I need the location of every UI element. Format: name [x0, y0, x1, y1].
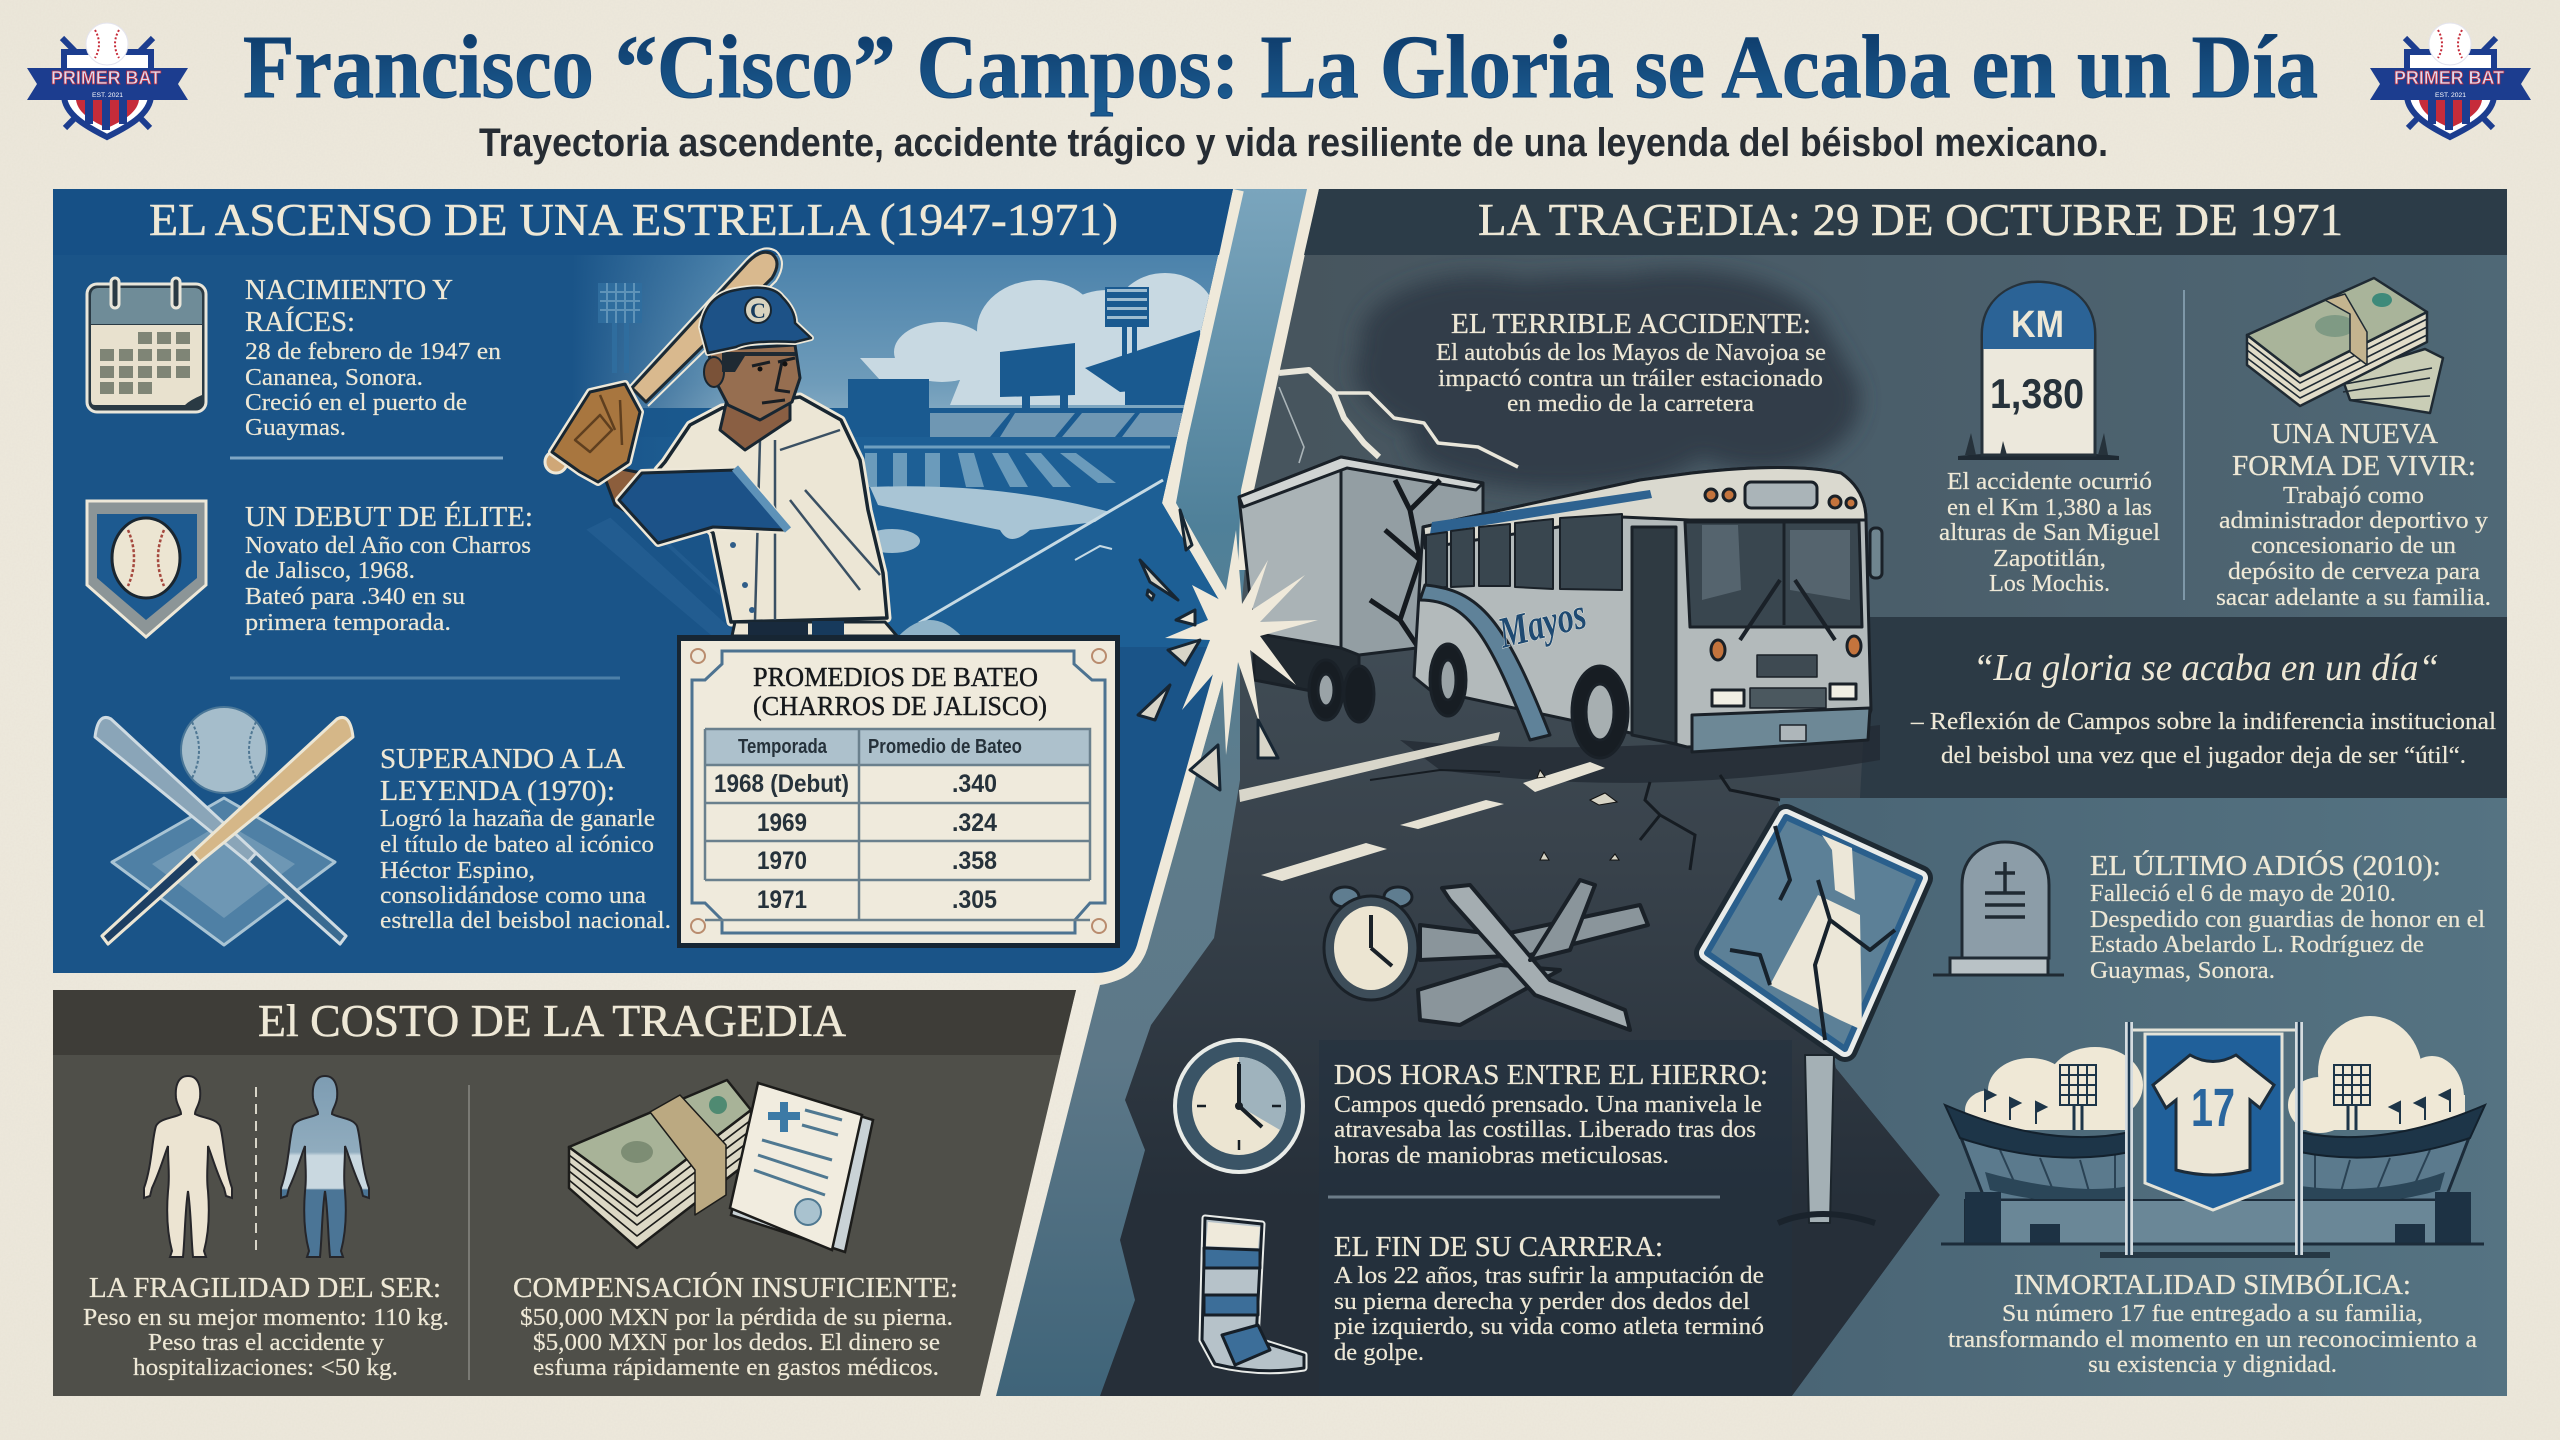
text: nacimiento: Cananea, Sonora.: [245, 365, 423, 391]
icon: calendar: [87, 278, 206, 412]
table grid: [705, 729, 1090, 765]
text: inmortalidad simbolica: Su número 17 fue entregado a su familia,: [2002, 1301, 2423, 1327]
text: km caption: Los Mochis.: [1989, 571, 2110, 597]
left fade: [530, 255, 724, 470]
belt: [732, 622, 897, 636]
table card: .324: [952, 809, 997, 837]
text: nueva forma de vivir: Trabajó como: [2283, 483, 2424, 509]
road: [1100, 620, 2507, 1396]
text: debut: primera temporada.: [245, 610, 451, 636]
illustration: batter: C: [750, 298, 766, 323]
text: debut: Bateó para .340 en su: [245, 584, 465, 610]
text: km caption: El accidente ocurrió: [1947, 469, 2152, 495]
text: compensacion: $50,000 MXN por la pérdida de su pierna.: [520, 1305, 953, 1331]
middle diagonal strip: [996, 189, 2000, 1396]
text: superando: estrella del beisbol nacional.: [380, 908, 671, 934]
text: nueva forma de vivir: depósito de cerveza para: [2228, 559, 2480, 585]
text: debut: UN DEBUT DE ÉLITE:: [245, 500, 533, 533]
text: fragilidad: Peso tras el accidente y: [148, 1330, 384, 1356]
illustration: trailer: [1239, 457, 1483, 722]
neck: [720, 395, 790, 450]
icon: leg cast: [1202, 1218, 1304, 1371]
stripe and team name: [1420, 585, 1550, 740]
light towers: [1105, 287, 1149, 356]
table card: .305: [952, 886, 997, 914]
text: debut: de Jalisco, 1968.: [245, 558, 415, 584]
header band: [53, 990, 1076, 1055]
icon: tombstone: [1933, 842, 2064, 975]
icon: money stack: [2247, 278, 2443, 413]
stadium scene: [588, 255, 1219, 647]
roofs: [1945, 1105, 2485, 1158]
text: km caption: [1939, 469, 2160, 597]
panel background upper: [1242, 189, 2507, 800]
icon: shield with ball: [87, 501, 206, 637]
logo right: PRIMER BAT: [2394, 68, 2504, 88]
white band around blue panel: [1094, 189, 1233, 973]
text: superando: Héctor Espino,: [380, 858, 535, 884]
panel: costo: [53, 990, 1076, 1396]
panel: ascenso: [53, 189, 1240, 973]
outfield: [626, 453, 1174, 490]
text: fin de carrera: A los 22 años, tras sufrir la amputación de: [1334, 1263, 1764, 1289]
storm cloud: [1355, 270, 1860, 490]
text: fin de carrera: EL FIN DE SU CARRERA:: [1334, 1231, 1663, 1263]
bumper: [1692, 708, 1870, 752]
text: km caption: alturas de San Miguel: [1939, 520, 2160, 546]
panel: la tragedia: [1100, 189, 2507, 1396]
clouds: [1965, 1016, 2465, 1140]
text: nacimiento: RAÍCES:: [245, 305, 355, 338]
seating: [638, 408, 1184, 440]
base: [1965, 1200, 2470, 1244]
text: ultimo adios: Guaymas, Sonora.: [2090, 958, 2275, 984]
text: inmortalidad simbolica: su existencia y dignidad.: [2088, 1352, 2337, 1378]
quote text: “La gloria se acaba en un día“: [1973, 647, 2439, 689]
text: fin de carrera: su pierna derecha y perder dos dedos del: [1334, 1289, 1750, 1315]
text: ultimo adios: Estado Abelardo L. Rodríguez de: [2090, 932, 2424, 958]
logo left: [27, 23, 188, 137]
cap: [701, 288, 811, 353]
wheels: [1572, 666, 1628, 758]
text: terrible accidente: EL TERRIBLE ACCIDENTE:: [1451, 308, 1811, 340]
text: km caption: Zapotitlán,: [1993, 546, 2106, 572]
text: nacimiento: Guaymas.: [245, 415, 346, 441]
quote band: [1860, 617, 2507, 798]
heading: LA TRAGEDIA: 29 DE OCTUBRE DE 1971: [1478, 195, 2343, 245]
text: ultimo adios: Falleció el 6 de mayo de 2010.: [2090, 881, 2396, 907]
sleeve: [619, 470, 784, 543]
heading: El COSTO DE LA TRAGEDIA: [258, 996, 847, 1046]
subtitle: Trayectoria ascendente, accidente trágico y vida resiliente de una leyenda del béisbol mexicano.: [479, 121, 2108, 165]
glove: [552, 384, 640, 482]
text: debut: Novato del Año con Charros: [245, 533, 531, 559]
jersey: [2153, 1055, 2274, 1175]
table card: .358: [952, 847, 997, 875]
text block shade: [1319, 1040, 1792, 1396]
logo right: EST. 2021: [2435, 93, 2467, 99]
text: inmortalidad simbolica: INMORTALIDAD SIMBÓLICA:: [2014, 1268, 2411, 1301]
faded light tower: [598, 283, 633, 373]
table card: 1968 (Debut): [714, 770, 849, 798]
text: nacimiento: 28 de febrero de 1947 en: [245, 339, 501, 365]
table text: Temporada: [738, 736, 828, 758]
text: inmortalidad simbolica: [1948, 1268, 2477, 1378]
text: debut: [245, 500, 533, 636]
text: inmortalidad simbolica: transformando el momento en un reconocimiento a: [1948, 1327, 2477, 1353]
light towers: [2060, 1065, 2370, 1130]
lower right panel: [1778, 798, 2507, 1396]
text: terrible accidente: impactó contra un tráiler estacionado: [1438, 366, 1823, 392]
illustration: road details: [1239, 725, 1880, 881]
text: nueva forma de vivir: concesionario de un: [2251, 533, 2456, 559]
text: dos horas: [1334, 1059, 1768, 1169]
destination sign and lamps: [1745, 482, 1817, 508]
text: superando: consolidándose como una: [380, 883, 646, 909]
bus door: [1632, 527, 1676, 744]
icon: crossed bats: [95, 707, 353, 945]
mirror: [1870, 528, 1882, 578]
text: dos horas: Campos quedó prensado. Una manivela le: [1334, 1092, 1762, 1118]
header band: [53, 189, 1233, 255]
text: fragilidad: hospitalizaciones: <50 kg.: [133, 1355, 398, 1381]
text: nueva forma de vivir: UNA NUEVA: [2271, 418, 2438, 450]
logo left: PRIMER BAT: [51, 68, 161, 88]
banner: [2145, 1034, 2282, 1210]
text: compensacion: esfuma rápidamente en gastos médicos.: [533, 1355, 939, 1381]
text: compensacion: [513, 1271, 958, 1381]
icon: km marker: 1,380: [1990, 370, 2084, 417]
text: ultimo adios: EL ÚLTIMO ADIÓS (2010):: [2090, 849, 2441, 882]
icon: km marker: KM: [2011, 304, 2064, 346]
icon: stadium and jersey banner: 17: [2191, 1078, 2235, 1138]
text: superando: LEYENDA (1970):: [380, 775, 615, 807]
head: [708, 345, 800, 420]
shatter burst and shards: [1138, 510, 1318, 790]
icon: money stack: [569, 1080, 751, 1248]
illustration: batter: [545, 248, 897, 636]
icon: broken road sign: [1707, 817, 1920, 1223]
icon: stadium and jersey banner: [1941, 1016, 2485, 1255]
table card: 1970: [757, 847, 807, 875]
illustration: bus: [1414, 468, 1882, 758]
white divider band: [1238, 189, 1319, 570]
text: nueva forma de vivir: administrador deportivo y: [2219, 508, 2488, 534]
table card: [677, 635, 1120, 948]
bat: [632, 252, 777, 402]
banner poles: [2129, 1022, 2299, 1255]
infield: [860, 487, 1240, 647]
scoreboards: [848, 343, 1075, 408]
logo right: [2370, 23, 2531, 137]
quote band: – Reflexión de Campos sobre la indiferencia institucional: [1910, 709, 2496, 735]
text: compensacion: COMPENSACIÓN INSUFICIENTE:: [513, 1271, 958, 1304]
quote band: del beisbol una vez que el jugador deja de ser “útil“.: [1941, 743, 2466, 769]
clouds: [860, 273, 1220, 405]
text: fin de carrera: pie izquierdo, su vida como atleta terminó: [1334, 1314, 1764, 1340]
text: dos horas: atravesaba las costillas. Liberado tras dos: [1334, 1117, 1756, 1143]
text: superando: [380, 743, 671, 934]
text: dos horas: horas de maniobras meticulosas.: [1334, 1143, 1669, 1169]
text: compensacion: $5,000 MXN por los dedos. El dinero se: [533, 1330, 940, 1356]
table card: (CHARROS DE JALISCO): [753, 691, 1047, 721]
table card: 1969: [757, 809, 807, 837]
text: km caption: en el Km 1,380 a las: [1947, 495, 2152, 521]
text: fragilidad: [83, 1272, 449, 1381]
text: terrible accidente: en medio de la carretera: [1507, 391, 1754, 417]
text: fin de carrera: de golpe.: [1334, 1340, 1424, 1366]
text: nueva forma de vivir: sacar adelante a su familia.: [2216, 585, 2491, 611]
text: dos horas: DOS HORAS ENTRE EL HIERRO:: [1334, 1059, 1768, 1091]
icon: alarm clock and bent bars: [1324, 880, 1648, 1030]
icon: wall clock: [1173, 1038, 1305, 1174]
lightning: [1279, 370, 1518, 467]
windshield: [1685, 522, 1862, 627]
text: ultimo adios: Despedido con guardias de honor en el: [2090, 907, 2485, 933]
illustration: bus: Mayos: [1493, 589, 1591, 658]
text: fragilidad: LA FRAGILIDAD DEL SER:: [89, 1272, 441, 1304]
text: superando: el título de bateo al icónico: [380, 832, 654, 858]
logo left: EST. 2021: [92, 93, 124, 99]
text: nueva forma de vivir: FORMA DE VIVIR:: [2232, 450, 2476, 482]
text: nueva forma de vivir: [2216, 418, 2491, 611]
bus windows: [1426, 514, 1622, 590]
table card: .340: [952, 770, 997, 798]
jersey: [658, 397, 887, 622]
forearm: [600, 465, 642, 520]
flags: [1985, 1090, 2450, 1124]
text: superando: Logró la hazaña de ganarle: [380, 806, 655, 832]
text: ultimo adios: [2090, 849, 2485, 984]
header band: [1304, 189, 2507, 255]
icon: healthy body: [144, 1076, 232, 1257]
text: fragilidad: Peso en su mejor momento: 110 kg.: [83, 1305, 449, 1331]
text: nacimiento: Creció en el puerto de: [245, 390, 467, 416]
text: terrible accidente: [1436, 308, 1826, 417]
text: nacimiento: NACIMIENTO Y: [245, 274, 453, 306]
table card: 1971: [757, 886, 807, 914]
title: Francisco “Cisco” Campos: La Gloria se Acaba en un Día: [243, 18, 2318, 117]
upper stand: [1085, 330, 1200, 392]
icon: medical papers: [730, 1083, 873, 1252]
icon: km marker: [1958, 282, 2119, 460]
table title: PROMEDIOS DE BATEO: [753, 662, 1038, 692]
text: terrible accidente: El autobús de los Mayos de Navojoa se: [1436, 340, 1826, 366]
text: fin de carrera: [1334, 1231, 1764, 1366]
text: superando: SUPERANDO A LA: [380, 743, 625, 775]
icon: injured body: [281, 1076, 369, 1257]
heading: EL ASCENSO DE UNA ESTRELLA (1947-1971): [149, 195, 1118, 245]
table card: Promedio de Bateo: [868, 736, 1022, 758]
text: nacimiento: [245, 274, 501, 441]
stands: [1960, 1135, 2470, 1200]
